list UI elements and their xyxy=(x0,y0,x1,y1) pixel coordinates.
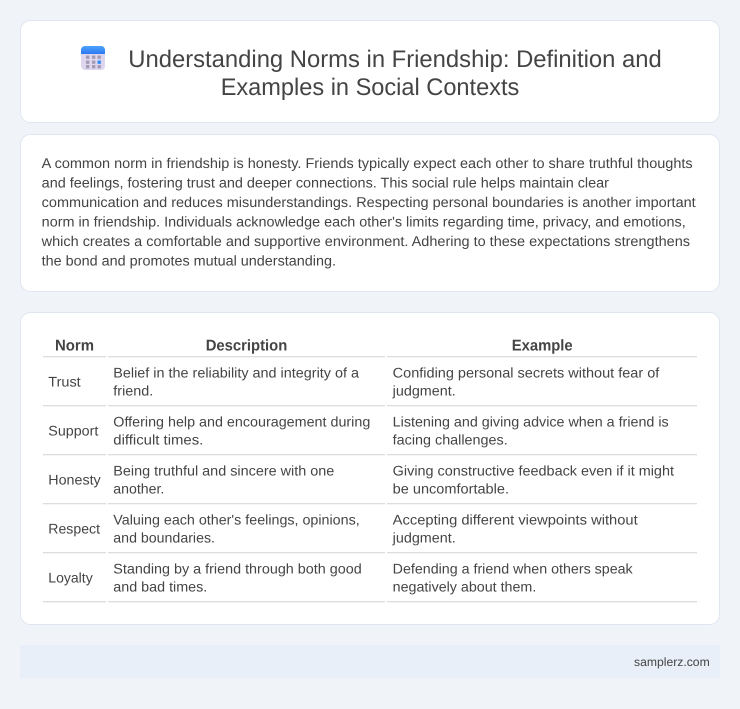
title: Understanding Norms in Friendship: Definition and xyxy=(128,46,662,73)
header panel xyxy=(20,20,720,122)
row: Loyalty: and bad times. xyxy=(113,578,207,594)
text block: paragraph: the bond and promotes mutual understanding. xyxy=(42,253,336,269)
row: Support: Support xyxy=(48,423,98,439)
panel: norms table xyxy=(20,312,720,624)
title: Examples in Social Contexts xyxy=(221,74,519,101)
text block: paragraph: A common norm in friendship is honesty. Friends typically expect each other to share truthful thoughts xyxy=(42,156,693,172)
row: Trust xyxy=(48,365,659,398)
row: Support: facing challenges. xyxy=(393,431,508,447)
row: Loyalty: Loyalty xyxy=(48,570,93,586)
text block: paragraph: communication and reduces misunderstandings. Respecting personal boundaries is another important xyxy=(42,195,696,211)
table header row: Description xyxy=(206,338,287,355)
row: Trust: Trust xyxy=(48,374,81,390)
icon: calendar xyxy=(81,46,105,70)
row: Trust: Belief in the reliability and integrity of a xyxy=(113,365,359,381)
row: Support: difficult times. xyxy=(113,431,203,447)
row: Loyalty: Standing by a friend through both good xyxy=(113,561,362,577)
row: Loyalty: negatively about them. xyxy=(393,578,536,594)
footer: samplerz.com xyxy=(634,655,710,669)
row: Respect: Valuing each other's feelings, opinions, xyxy=(113,512,360,528)
row: Respect: Respect xyxy=(48,521,100,537)
row: Honesty: another. xyxy=(113,480,164,496)
row: Respect xyxy=(48,512,638,545)
text block: paragraph: norm in friendship. Individuals acknowledge each other's limits regarding time, privacy, and emotions, xyxy=(42,215,686,231)
text block: paragraph: and feelings, fostering trust and deeper connections. This social rule helps maintain clear xyxy=(42,176,609,192)
table header row: Norm xyxy=(55,338,94,355)
row: Respect: judgment. xyxy=(392,529,456,545)
row: Support xyxy=(48,414,669,447)
panel: intro paragraph xyxy=(20,134,720,292)
footer xyxy=(20,645,720,678)
row: Support: Listening and giving advice when a friend is xyxy=(393,414,669,430)
row: Trust: friend. xyxy=(113,382,153,398)
row: Honesty: be uncomfortable. xyxy=(393,480,509,496)
row: Honesty: Honesty xyxy=(48,472,101,488)
row: Respect: and boundaries. xyxy=(113,529,215,545)
row: Loyalty xyxy=(48,561,634,594)
table header row xyxy=(55,338,573,355)
row: Honesty: Being truthful and sincere with one xyxy=(113,463,335,479)
row: Support: Offering help and encouragement during xyxy=(113,414,370,430)
row: Honesty xyxy=(48,463,674,496)
text block: paragraph xyxy=(41,156,696,269)
title xyxy=(128,46,662,101)
table header row: Example xyxy=(512,338,573,355)
text block: paragraph: which creates a comfortable and supportive environment. Adhering to these expectations strengthens xyxy=(41,234,690,250)
row: Loyalty: Defending a friend when others speak xyxy=(393,561,634,577)
row: Honesty: Giving constructive feedback even if it might xyxy=(393,463,674,479)
row: Trust: judgment. xyxy=(392,382,456,398)
row: Respect: Accepting different viewpoints without xyxy=(393,512,638,528)
row: Trust: Confiding personal secrets without fear of xyxy=(393,365,659,381)
